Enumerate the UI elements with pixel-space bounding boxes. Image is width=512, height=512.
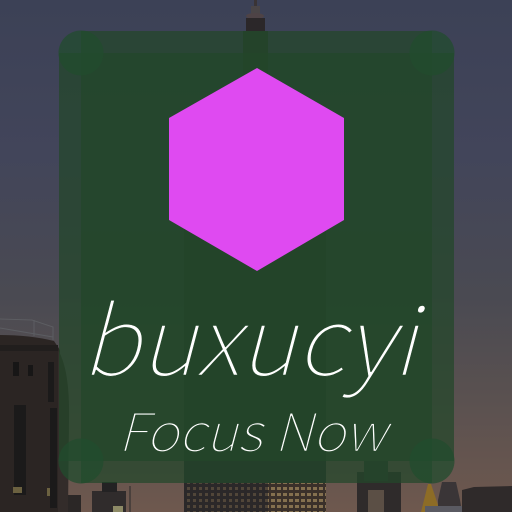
background: left round tower xyxy=(0,319,69,512)
subtitle: Focus Now xyxy=(118,391,393,466)
background: right buildings xyxy=(421,482,512,512)
panel: translucent green card xyxy=(58,30,454,484)
title: buxucyi xyxy=(81,267,426,403)
icon: magenta hexagon xyxy=(169,68,344,271)
background: small buildings xyxy=(68,461,401,512)
background: skyscraper xyxy=(184,0,326,512)
